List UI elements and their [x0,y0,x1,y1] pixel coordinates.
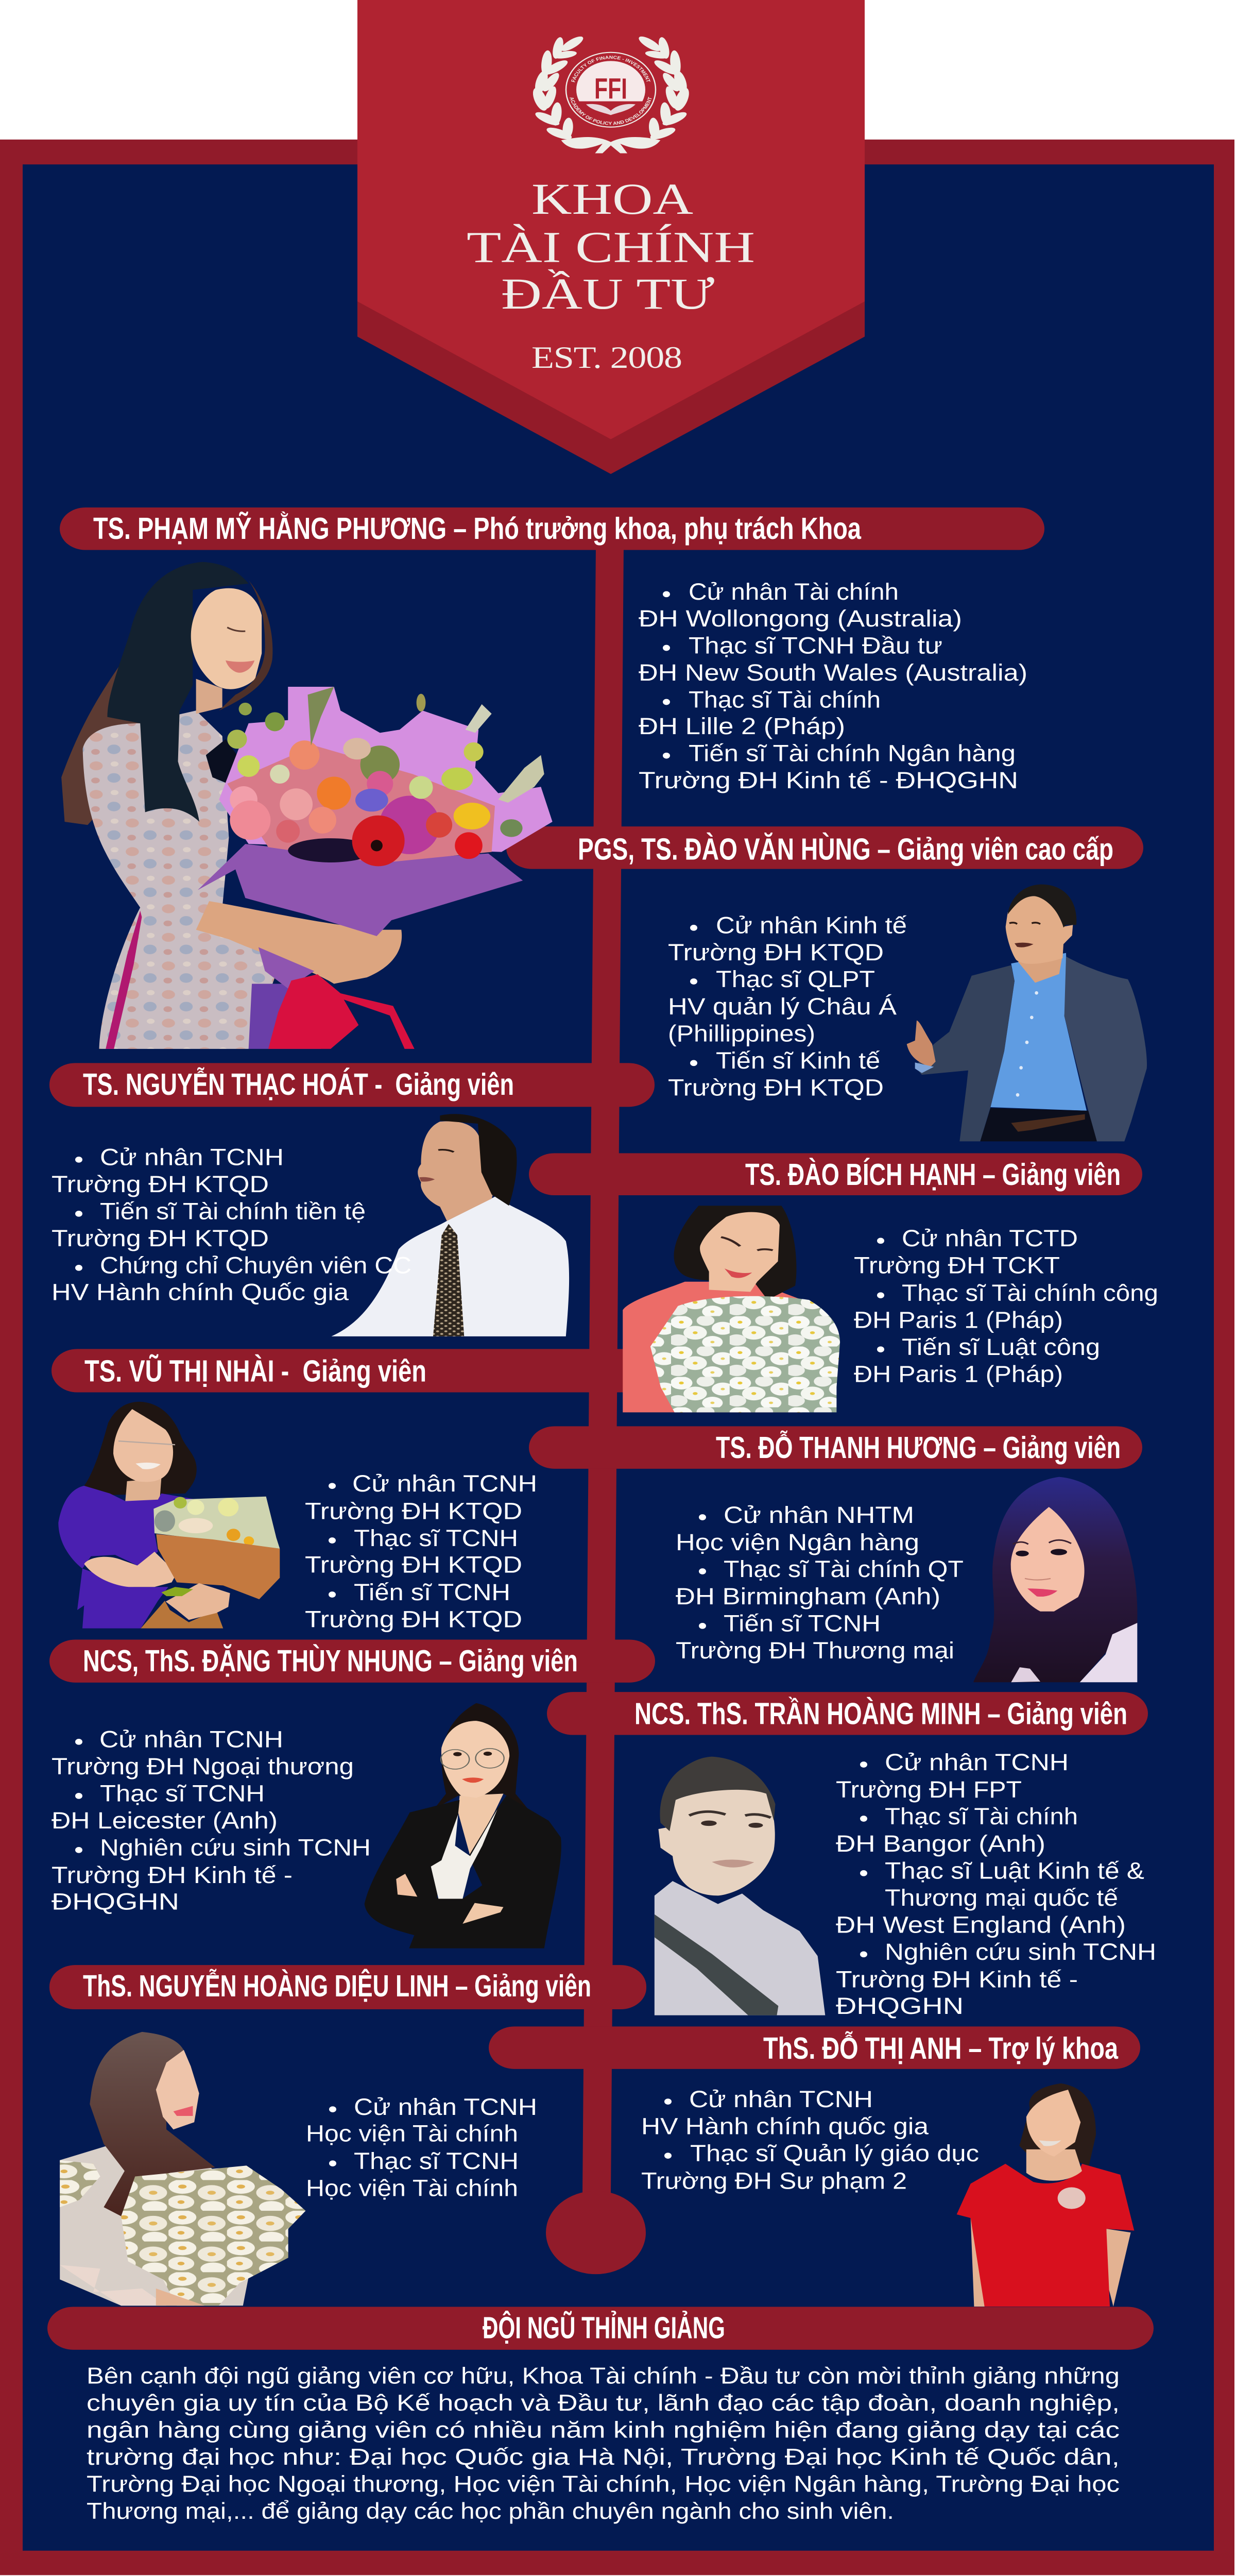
text: qualifications Do Thanh Huong: Thạc sĩ Tài chính QT [724,1556,964,1582]
text: qualifications Do Thi Anh: Trường ĐH Sư phạm 2 [641,2168,907,2194]
text: qualifications Nguyen Thac Hoat [52,1144,411,1305]
heading pill: Dang Thuy Nhung [49,1639,655,1683]
text: qualifications Do Thanh Huong: ĐH Birmingham (Anh) [676,1583,940,1609]
text: qualifications Pham My Hang Phuong: Thạc sĩ TCNH Đầu tư [689,633,942,658]
logo: laurel wreath and faculty seal [533,36,689,154]
text: qualifications Tran Hoang Minh: ĐH Bangor (Anh) [836,1831,1045,1857]
photo: young woman in black blazer with glasses [365,1703,561,1948]
text: qualifications Dao Van Hung: Trường ĐH KTQD [668,1075,884,1101]
text: qualifications Dao Bich Hanh: ĐH Paris 1 (Pháp) [854,1361,1063,1387]
heading pill: Pham My Hang Phuong: TS. PHẠM MỸ HẰNG PHƯƠNG – Phó trưởng khoa, phụ trách Khoa [93,511,861,546]
text: qualifications Tran Hoang Minh: Nghiên cứu sinh TCNH [885,1939,1156,1965]
text: qualifications Dang Thuy Nhung [52,1726,371,1915]
heading pill: Pham My Hang Phuong [60,507,1044,550]
text: qualifications Do Thanh Huong: Tiến sĩ TCNH [724,1611,881,1637]
photo: woman with long dark wavy hair [973,1477,1137,1682]
text block: visiting lecturers description [87,2364,1120,2524]
heading pill: Vu Thi Nhai: TS. VŨ THỊ NHÀI - Giảng viên [84,1354,426,1388]
text: qualifications Dao Van Hung [668,912,907,1101]
text: qualifications Do Thi Anh: HV Hành chính quốc gia [641,2113,929,2139]
text: qualifications Nguyen Thac Hoat: Trường ĐH KTQD [52,1225,269,1251]
text: qualifications Pham My Hang Phuong: ĐH Wollongong (Australia) [639,605,962,632]
text: qualifications Vu Thi Nhai: Trường ĐH KTQD [305,1606,522,1632]
text: qualifications Tran Hoang Minh: Thạc sĩ Luật Kinh tế & [885,1858,1144,1884]
photo: woman in purple dress with kraft bouquet [58,1402,280,1629]
text: qualifications Do Thanh Huong: Học viện Ngân hàng [676,1529,919,1555]
text block: visiting lecturers description: Bên cạnh đội ngũ giảng viên cơ hữu, Khoa Tài chính - Đầu tư còn mời thỉnh giảng những [87,2364,1120,2389]
logo: laurel wreath and faculty seal: ACADEMY OF POLICY AND DEVELOPMENT [570,97,652,125]
text: qualifications Dao Bich Hanh: Trường ĐH TCKT [854,1252,1060,1279]
heading pill: visiting lecturers [47,2307,1154,2350]
heading pill: Nguyen Hoang Dieu Linh [49,1965,646,2009]
photo: young man with grey shirt and bag strap [655,1757,825,2015]
text: qualifications Dang Thuy Nhung: Trường ĐH Kinh tế - [52,1862,293,1888]
established year: EST. 2008 [531,341,682,375]
text block: visiting lecturers description: trường đại học như: Đại học Quốc gia Hà Nội, Trường Đại học Kinh tế Quốc dân, [87,2445,1120,2470]
text: qualifications Dao Bich Hanh: ĐH Paris 1 (Pháp) [854,1307,1063,1333]
text: qualifications Dao Bich Hanh: Thạc sĩ Tài chính công [902,1280,1158,1306]
text: qualifications Dao Bich Hanh: Cử nhân TCTD [902,1225,1078,1251]
photo: man in navy blazer and blue shirt [907,885,1147,1141]
text: qualifications Tran Hoang Minh: ĐHQGHN [836,1993,964,2019]
banner ribbon [357,0,865,474]
text: qualifications Dao Van Hung: Thạc sĩ QLPT [716,966,875,992]
text: qualifications Nguyen Thac Hoat: Cử nhân TCNH [100,1144,284,1171]
text: qualifications Pham My Hang Phuong: Trường ĐH Kinh tế - ĐHQGHN [639,767,1018,793]
text: qualifications Dang Thuy Nhung: Thạc sĩ TCNH [100,1781,265,1807]
text: qualifications Pham My Hang Phuong [639,579,1027,793]
text: qualifications Nguyen Hoang Dieu Linh: Thạc sĩ TCNH [354,2148,519,2174]
text: qualifications Pham My Hang Phuong: ĐH Lille 2 (Pháp) [639,713,845,739]
text block: visiting lecturers description: Trường Đại học Ngoại thương, Học viện Tài chính, Học viện Ngân hàng, Trường Đại học [87,2472,1120,2497]
heading pill: Do Thanh Huong [529,1426,1142,1469]
text: qualifications Pham My Hang Phuong: Thạc sĩ Tài chính [689,687,881,713]
photo: woman in coral ao dai with white daisies [623,1206,840,1412]
title [467,175,755,318]
text: qualifications Do Thi Anh: Cử nhân TCNH [689,2086,873,2112]
logo: laurel wreath and faculty seal: FFI [594,73,627,105]
logo: laurel wreath and faculty seal: FACULTY OF FINANCE - INVESTMENT [571,56,650,82]
heading pill: visiting lecturers: ĐỘI NGŨ THỈNH GIẢNG [483,2311,725,2345]
heading pill: Vu Thi Nhai [52,1349,658,1392]
heading pill: Dao Bich Hanh [529,1153,1142,1195]
text block: visiting lecturers description: Thương mại,... để giảng dạy các học phần chuyên ngành cho sinh viên. [87,2499,894,2524]
heading pill: Dao Van Hung [506,826,1143,869]
text: qualifications Do Thanh Huong: Cử nhân NHTM [724,1502,914,1528]
text: qualifications Pham My Hang Phuong: Cử nhân Tài chính [689,579,899,605]
title: KHOA [531,175,693,224]
heading pill: Nguyen Thac Hoat: TS. NGUYỄN THẠC HOÁT - Giảng viên [83,1067,514,1101]
text block: visiting lecturers description: ngân hàng cùng giảng viên có nhiều năm kinh nghiệm hiện đang giảng dạy tại các [87,2418,1120,2443]
text: qualifications Vu Thi Nhai: Thạc sĩ TCNH [354,1525,518,1551]
text: qualifications Tran Hoang Minh: Thương mại quốc tế [885,1885,1118,1911]
text: qualifications Tran Hoang Minh [836,1749,1156,2019]
text: qualifications Nguyen Hoang Dieu Linh: Học viện Tài chính [306,2175,518,2201]
text: qualifications Dao Van Hung: Trường ĐH KTQD [668,939,884,965]
title: TÀI CHÍNH [467,223,755,272]
photo: woman in ao dai with colourful bouquet [61,562,553,1049]
text: qualifications Do Thanh Huong: Trường ĐH Thương mại [676,1637,954,1664]
photo: woman in red lace dress [957,2083,1134,2307]
text: qualifications Vu Thi Nhai: Trường ĐH KTQD [305,1498,522,1524]
text: qualifications Dang Thuy Nhung: Trường ĐH Ngoại thương [52,1753,354,1780]
heading pill: Tran Hoang Minh [547,1692,1148,1735]
text: qualifications Vu Thi Nhai: Tiến sĩ TCNH [354,1579,510,1605]
text: qualifications Do Thanh Huong [676,1502,964,1664]
text: qualifications Dao Van Hung: HV quản lý Châu Á [668,993,897,1020]
text: qualifications Nguyen Hoang Dieu Linh: Cử nhân TCNH [354,2094,537,2120]
text: qualifications Tran Hoang Minh: Trường ĐH Kinh tế - [836,1967,1078,1992]
text: qualifications Dang Thuy Nhung: ĐHQGHN [52,1889,179,1915]
text: qualifications Nguyen Thac Hoat: Tiến sĩ Tài chính tiền tệ [100,1198,366,1225]
text: qualifications Tran Hoang Minh: Thạc sĩ Tài chính [885,1803,1078,1829]
heading pill: Nguyen Thac Hoat [49,1063,655,1107]
text: qualifications Dang Thuy Nhung: ĐH Leicester (Anh) [52,1807,278,1834]
text: qualifications Vu Thi Nhai: Trường ĐH KTQD [305,1552,522,1578]
title: ĐẦU TƯ [501,269,715,318]
heading pill: Nguyen Hoang Dieu Linh: ThS. NGUYỄN HOÀNG DIỆU LINH – Giảng viên [83,1969,591,2003]
text: qualifications Dao Van Hung: Cử nhân Kinh tế [716,912,907,939]
heading pill: Dang Thuy Nhung: NCS, ThS. ĐẶNG THÙY NHUNG – Giảng viên [83,1644,578,1678]
text: qualifications Do Thi Anh [641,2086,979,2194]
text: qualifications Vu Thi Nhai: Cử nhân TCNH [352,1470,537,1497]
text: qualifications Dao Bich Hanh: Tiến sĩ Luật công [902,1334,1100,1360]
photo: woman in white ao dai with cream daisies [60,2032,305,2306]
timeline spine with end circle [546,545,646,2274]
text: qualifications Dao Van Hung: Tiến sĩ Kinh tế [716,1047,880,1074]
text: qualifications Pham My Hang Phuong: Tiến sĩ Tài chính Ngân hàng [689,740,1016,766]
text: qualifications Do Thi Anh: Thạc sĩ Quản lý giáo dục [690,2140,979,2166]
text: qualifications Tran Hoang Minh: ĐH West England (Anh) [836,1912,1126,1938]
text: qualifications Dao Van Hung: (Phillippines) [668,1021,815,1047]
text: qualifications Nguyen Thac Hoat: HV Hành chính Quốc gia [52,1279,349,1305]
text: qualifications Dang Thuy Nhung: Nghiên cứu sinh TCNH [100,1835,371,1861]
text: qualifications Nguyen Hoang Dieu Linh [306,2094,537,2201]
heading pill: Do Thi Anh [489,2026,1140,2069]
photo: man in white shirt and dotted tie [331,1114,569,1336]
text: qualifications Vu Thi Nhai [305,1470,537,1632]
text: qualifications Nguyen Thac Hoat: Chứng chỉ Chuyên viên CC [100,1252,411,1279]
text: qualifications Dang Thuy Nhung: Cử nhân TCNH [99,1726,283,1753]
text: qualifications Nguyen Thac Hoat: Trường ĐH KTQD [52,1171,269,1197]
text: qualifications Tran Hoang Minh: Trường ĐH FPT [836,1776,1022,1803]
text: qualifications Dao Bich Hanh [854,1225,1158,1387]
text: qualifications Tran Hoang Minh: Cử nhân TCNH [885,1749,1069,1775]
text block: visiting lecturers description: chuyên gia uy tín của Bộ Kế hoạch và Đầu tư, lãnh đạo các tập đoàn, doanh nghiệp, [87,2391,1120,2416]
text: qualifications Nguyen Hoang Dieu Linh: Học viện Tài chính [306,2121,518,2147]
text: qualifications Pham My Hang Phuong: ĐH New South Wales (Australia) [639,659,1027,686]
